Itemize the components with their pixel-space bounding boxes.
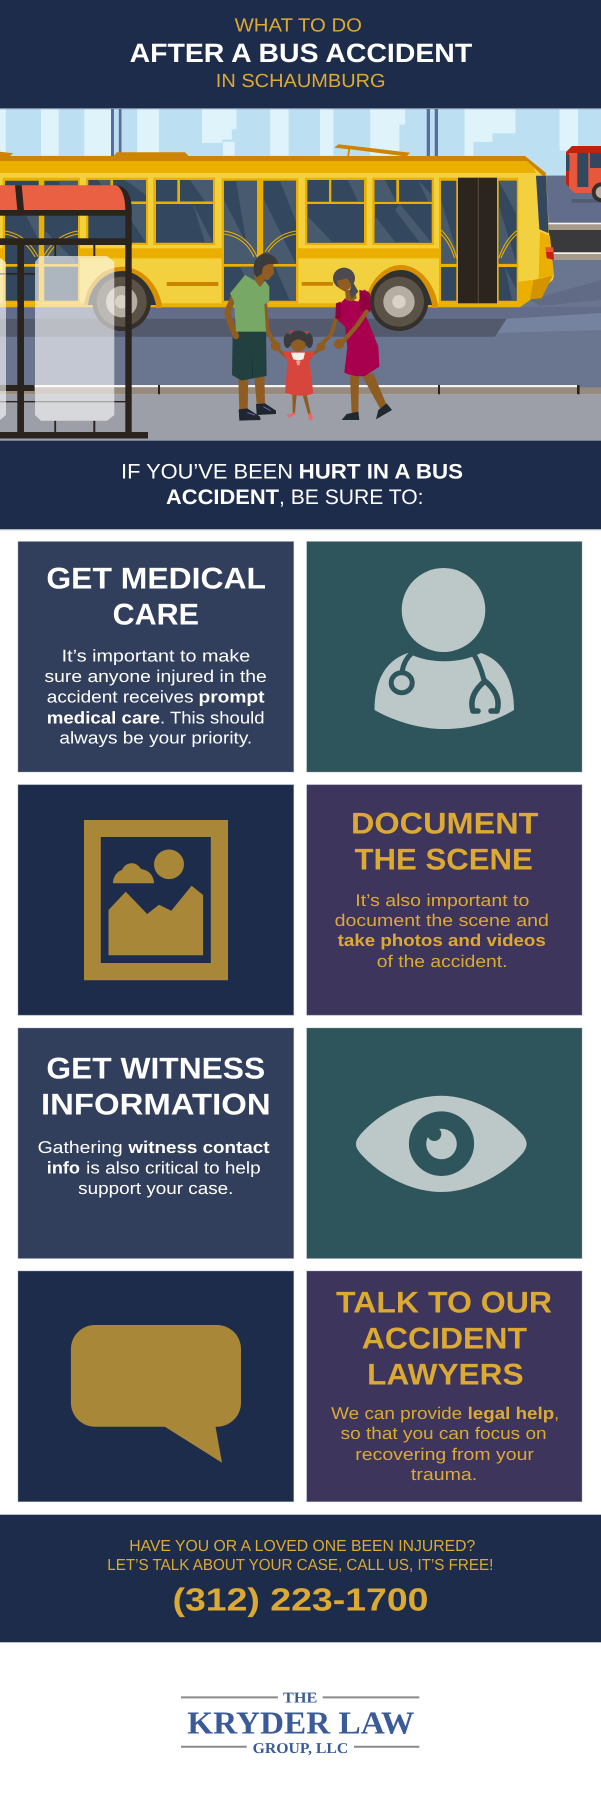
bus wheels bbox=[84, 265, 438, 331]
body text: trauma. bbox=[411, 1465, 477, 1484]
body text: prompt bbox=[198, 687, 265, 706]
body text bbox=[44, 646, 267, 747]
body text: document the scene and bbox=[335, 911, 549, 930]
heading: ACCIDENT bbox=[362, 1323, 527, 1356]
body text: medical care bbox=[47, 708, 160, 727]
subheading line 1: IF YOU’VE BEEN bbox=[121, 461, 293, 484]
body text: witness contact bbox=[127, 1138, 270, 1157]
panel: get medical care bbox=[18, 542, 294, 772]
heading: THE SCENE bbox=[354, 843, 533, 876]
bus door bbox=[458, 178, 497, 303]
people bbox=[227, 253, 392, 421]
icon: speech bubble bbox=[71, 1325, 241, 1463]
bus body bbox=[0, 156, 554, 307]
logo: the kryder law group: THE bbox=[283, 1691, 317, 1707]
heading bbox=[336, 1287, 552, 1392]
distant red bus bbox=[566, 146, 601, 203]
heading: LAWYERS bbox=[367, 1359, 524, 1392]
decorative window arches bbox=[5, 230, 517, 258]
body text: take photos and videos bbox=[338, 931, 546, 950]
body text bbox=[38, 1138, 270, 1198]
window frames bbox=[3, 178, 518, 303]
father bbox=[227, 253, 281, 421]
sky and skyline bbox=[0, 108, 601, 176]
logo: the kryder law group: KRYDER LAW bbox=[187, 1704, 414, 1740]
child bbox=[278, 330, 322, 420]
body text: always be your priority. bbox=[59, 728, 252, 747]
body text: , bbox=[554, 1404, 559, 1423]
panel: talk to our accident lawyers bbox=[307, 1271, 582, 1502]
heading bbox=[41, 1053, 271, 1122]
subheading line 1 bbox=[121, 461, 463, 484]
illustration: family beside bus at a bus stop bbox=[0, 108, 601, 441]
body text: It’s also important to bbox=[355, 891, 529, 910]
panel: doctor icon bbox=[307, 542, 582, 772]
body text: accident receives bbox=[47, 687, 194, 706]
shelter glass panels bbox=[0, 256, 114, 421]
logo: the kryder law group bbox=[181, 1691, 419, 1757]
phone number: (312) 223-1700 bbox=[172, 1581, 428, 1617]
icon: eye bbox=[356, 1096, 527, 1192]
road bbox=[0, 176, 601, 388]
body text: Gathering bbox=[38, 1138, 123, 1157]
call-to-action question: HAVE YOU OR A LOVED ONE BEEN INJURED? bbox=[129, 1538, 475, 1555]
window glass bbox=[5, 180, 517, 301]
logo: the kryder law group: GROUP, LLC bbox=[253, 1741, 348, 1757]
roof hatches and pantograph bbox=[0, 144, 410, 157]
body text: of the accident. bbox=[377, 952, 508, 971]
panel: speech bubble icon bbox=[18, 1271, 294, 1502]
body text: legal help bbox=[468, 1404, 554, 1423]
body text bbox=[331, 1404, 559, 1484]
panel: photo icon bbox=[18, 785, 294, 1015]
panel: get witness information bbox=[18, 1028, 294, 1258]
icon: framed picture bbox=[84, 820, 228, 980]
call-to-action footer bbox=[0, 1515, 601, 1642]
body text bbox=[335, 891, 549, 971]
body text: recovering from your bbox=[355, 1445, 534, 1464]
heading: GET MEDICAL bbox=[46, 563, 266, 596]
subheading band bbox=[0, 441, 601, 530]
mother bbox=[317, 268, 392, 420]
heading: CARE bbox=[113, 599, 199, 632]
title: AFTER A BUS ACCIDENT bbox=[130, 38, 472, 68]
subheading line 2 bbox=[166, 486, 424, 509]
body text: It’s important to make bbox=[62, 646, 250, 665]
panel: eye icon bbox=[307, 1028, 582, 1258]
yellow bus bbox=[0, 144, 554, 307]
body text: info bbox=[47, 1158, 80, 1177]
body text: sure anyone injured in the bbox=[44, 667, 267, 686]
header line: what to do: WHAT TO DO bbox=[235, 16, 362, 37]
heading bbox=[351, 807, 538, 876]
bus shelter bbox=[0, 185, 148, 438]
heading: TALK TO OUR bbox=[336, 1287, 552, 1320]
header line: location: IN SCHAUMBURG bbox=[216, 71, 386, 92]
panel: document the scene bbox=[307, 785, 582, 1015]
subheading line 2: ACCIDENT bbox=[166, 486, 279, 509]
subheading line 2: , BE SURE TO: bbox=[279, 486, 424, 509]
header banner bbox=[0, 0, 601, 108]
body text: We can provide bbox=[331, 1404, 462, 1423]
body text: so that you can focus on bbox=[341, 1424, 547, 1443]
heading bbox=[46, 563, 266, 632]
curb and sidewalk bbox=[0, 385, 601, 441]
icon: doctor with stethoscope bbox=[374, 568, 514, 729]
body text: . This should bbox=[160, 708, 264, 727]
body text: support your case. bbox=[78, 1179, 233, 1198]
body text: is also critical to help bbox=[86, 1158, 261, 1177]
bus shadow bbox=[0, 318, 507, 337]
heading: GET WITNESS bbox=[46, 1053, 265, 1086]
window reflections bbox=[20, 180, 517, 301]
call-to-action invitation: LET’S TALK ABOUT YOUR CASE, CALL US, IT’S FREE! bbox=[107, 1557, 493, 1574]
subheading line 1: HURT IN A BUS bbox=[299, 461, 463, 484]
heading: INFORMATION bbox=[41, 1089, 271, 1122]
heading: DOCUMENT bbox=[351, 807, 538, 840]
